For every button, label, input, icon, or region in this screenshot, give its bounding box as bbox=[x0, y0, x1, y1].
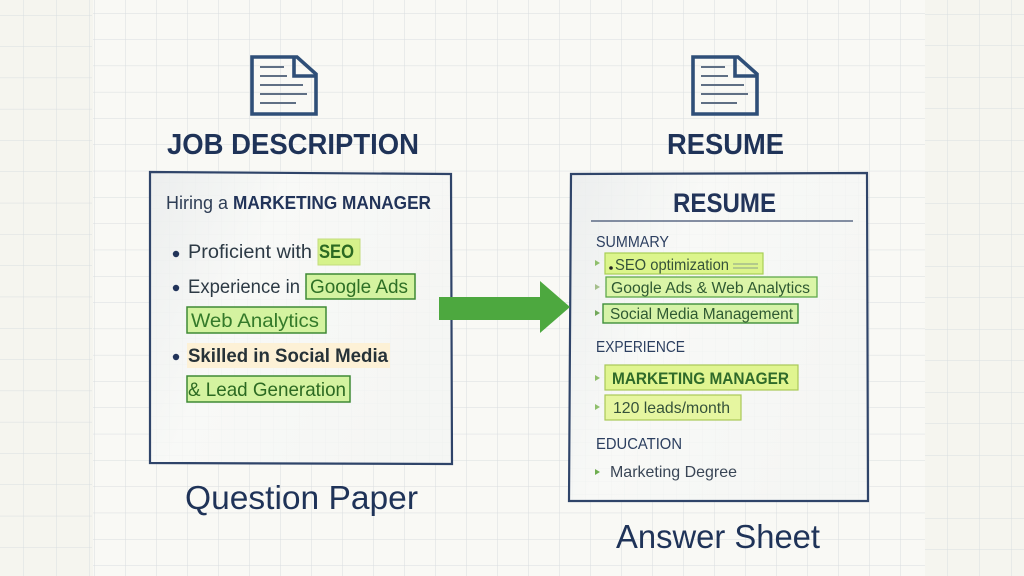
section heading: summary: SUMMARY bbox=[596, 234, 669, 251]
bullet: SEO: Proficient with bbox=[188, 241, 312, 263]
heading: job description: JOB DESCRIPTION bbox=[167, 129, 419, 161]
tag: SEO optimization: SEO optimization bbox=[615, 257, 729, 274]
tag: Marketing Manager: MARKETING MANAGER bbox=[612, 370, 789, 388]
tag: Google Ads and Web Analytics: Google Ads & Web Analytics bbox=[611, 280, 810, 297]
panel: job description paper bbox=[150, 172, 452, 464]
tag: 120 leads per month: 120 leads/month bbox=[613, 400, 730, 417]
icon: resume document bbox=[693, 57, 757, 114]
heading: resume: RESUME bbox=[667, 129, 784, 161]
bullet: Google Ads bbox=[173, 274, 415, 299]
item: Marketing Degree: Marketing Degree bbox=[610, 464, 737, 481]
panel: resume sheet bbox=[569, 173, 868, 501]
tag: Marketing Manager bbox=[595, 365, 798, 390]
tag: Lead Generation: & Lead Generation bbox=[188, 379, 346, 401]
tag: Web Analytics: Web Analytics bbox=[191, 310, 319, 332]
caption: question paper: Question Paper bbox=[185, 479, 418, 516]
tag: 120 leads per month bbox=[595, 395, 741, 420]
section heading: education: EDUCATION bbox=[596, 436, 682, 453]
bullet: SEO: SEO bbox=[319, 241, 354, 263]
caption: answer sheet: Answer Sheet bbox=[616, 518, 820, 555]
tag: SEO optimization bbox=[595, 253, 763, 274]
bullet: Social Media: Skilled in Social Media bbox=[188, 345, 388, 367]
bullet: Google Ads: Google Ads bbox=[310, 276, 408, 298]
panel: job description paper: MARKETING MANAGER bbox=[233, 193, 431, 213]
bullet: Google Ads: Experience in bbox=[188, 276, 300, 298]
bullet: SEO bbox=[173, 239, 360, 265]
section heading: experience: EXPERIENCE bbox=[596, 339, 685, 356]
arrow: job description to resume bbox=[439, 281, 570, 333]
tag: Social Media Management: Social Media Management bbox=[610, 306, 794, 323]
job title line: Hiring a bbox=[166, 193, 229, 213]
resume title: RESUME bbox=[673, 188, 776, 218]
icon: job description document bbox=[252, 57, 316, 114]
